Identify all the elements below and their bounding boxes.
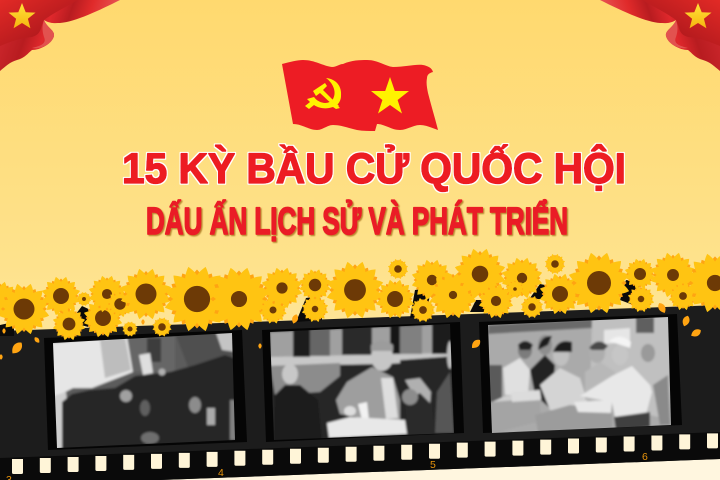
- sunflower garland: [0, 247, 720, 341]
- icon: party and national flag: [282, 60, 438, 131]
- frame numbers: 5: [430, 459, 436, 471]
- frame numbers: 4: [218, 467, 224, 479]
- sprocket band: [0, 432, 720, 480]
- scattered falling petals: [0, 301, 703, 360]
- frame numbers: [6, 451, 648, 480]
- dark shadow patches behind sunflowers: [0, 280, 640, 336]
- icon: yellow star: [371, 77, 409, 114]
- photo frame 1: crowd at voting notice board: [44, 330, 247, 452]
- film strip: [0, 280, 720, 480]
- frame numbers: 6: [642, 451, 648, 463]
- cream strip below film: [0, 440, 720, 480]
- photo frame 2: President casting ballot: [262, 320, 464, 445]
- icon: hammer and sickle: [305, 78, 341, 109]
- corner flag ribbon: top left: [0, 0, 120, 71]
- corner flag ribbon: top right: [600, 0, 720, 71]
- title: 15 KỲ BẦU CỬ QUỐC HỘI: [122, 144, 626, 193]
- sprocket holes: [12, 433, 718, 474]
- photo frame 3: women voting at ballot boxes: [479, 312, 682, 437]
